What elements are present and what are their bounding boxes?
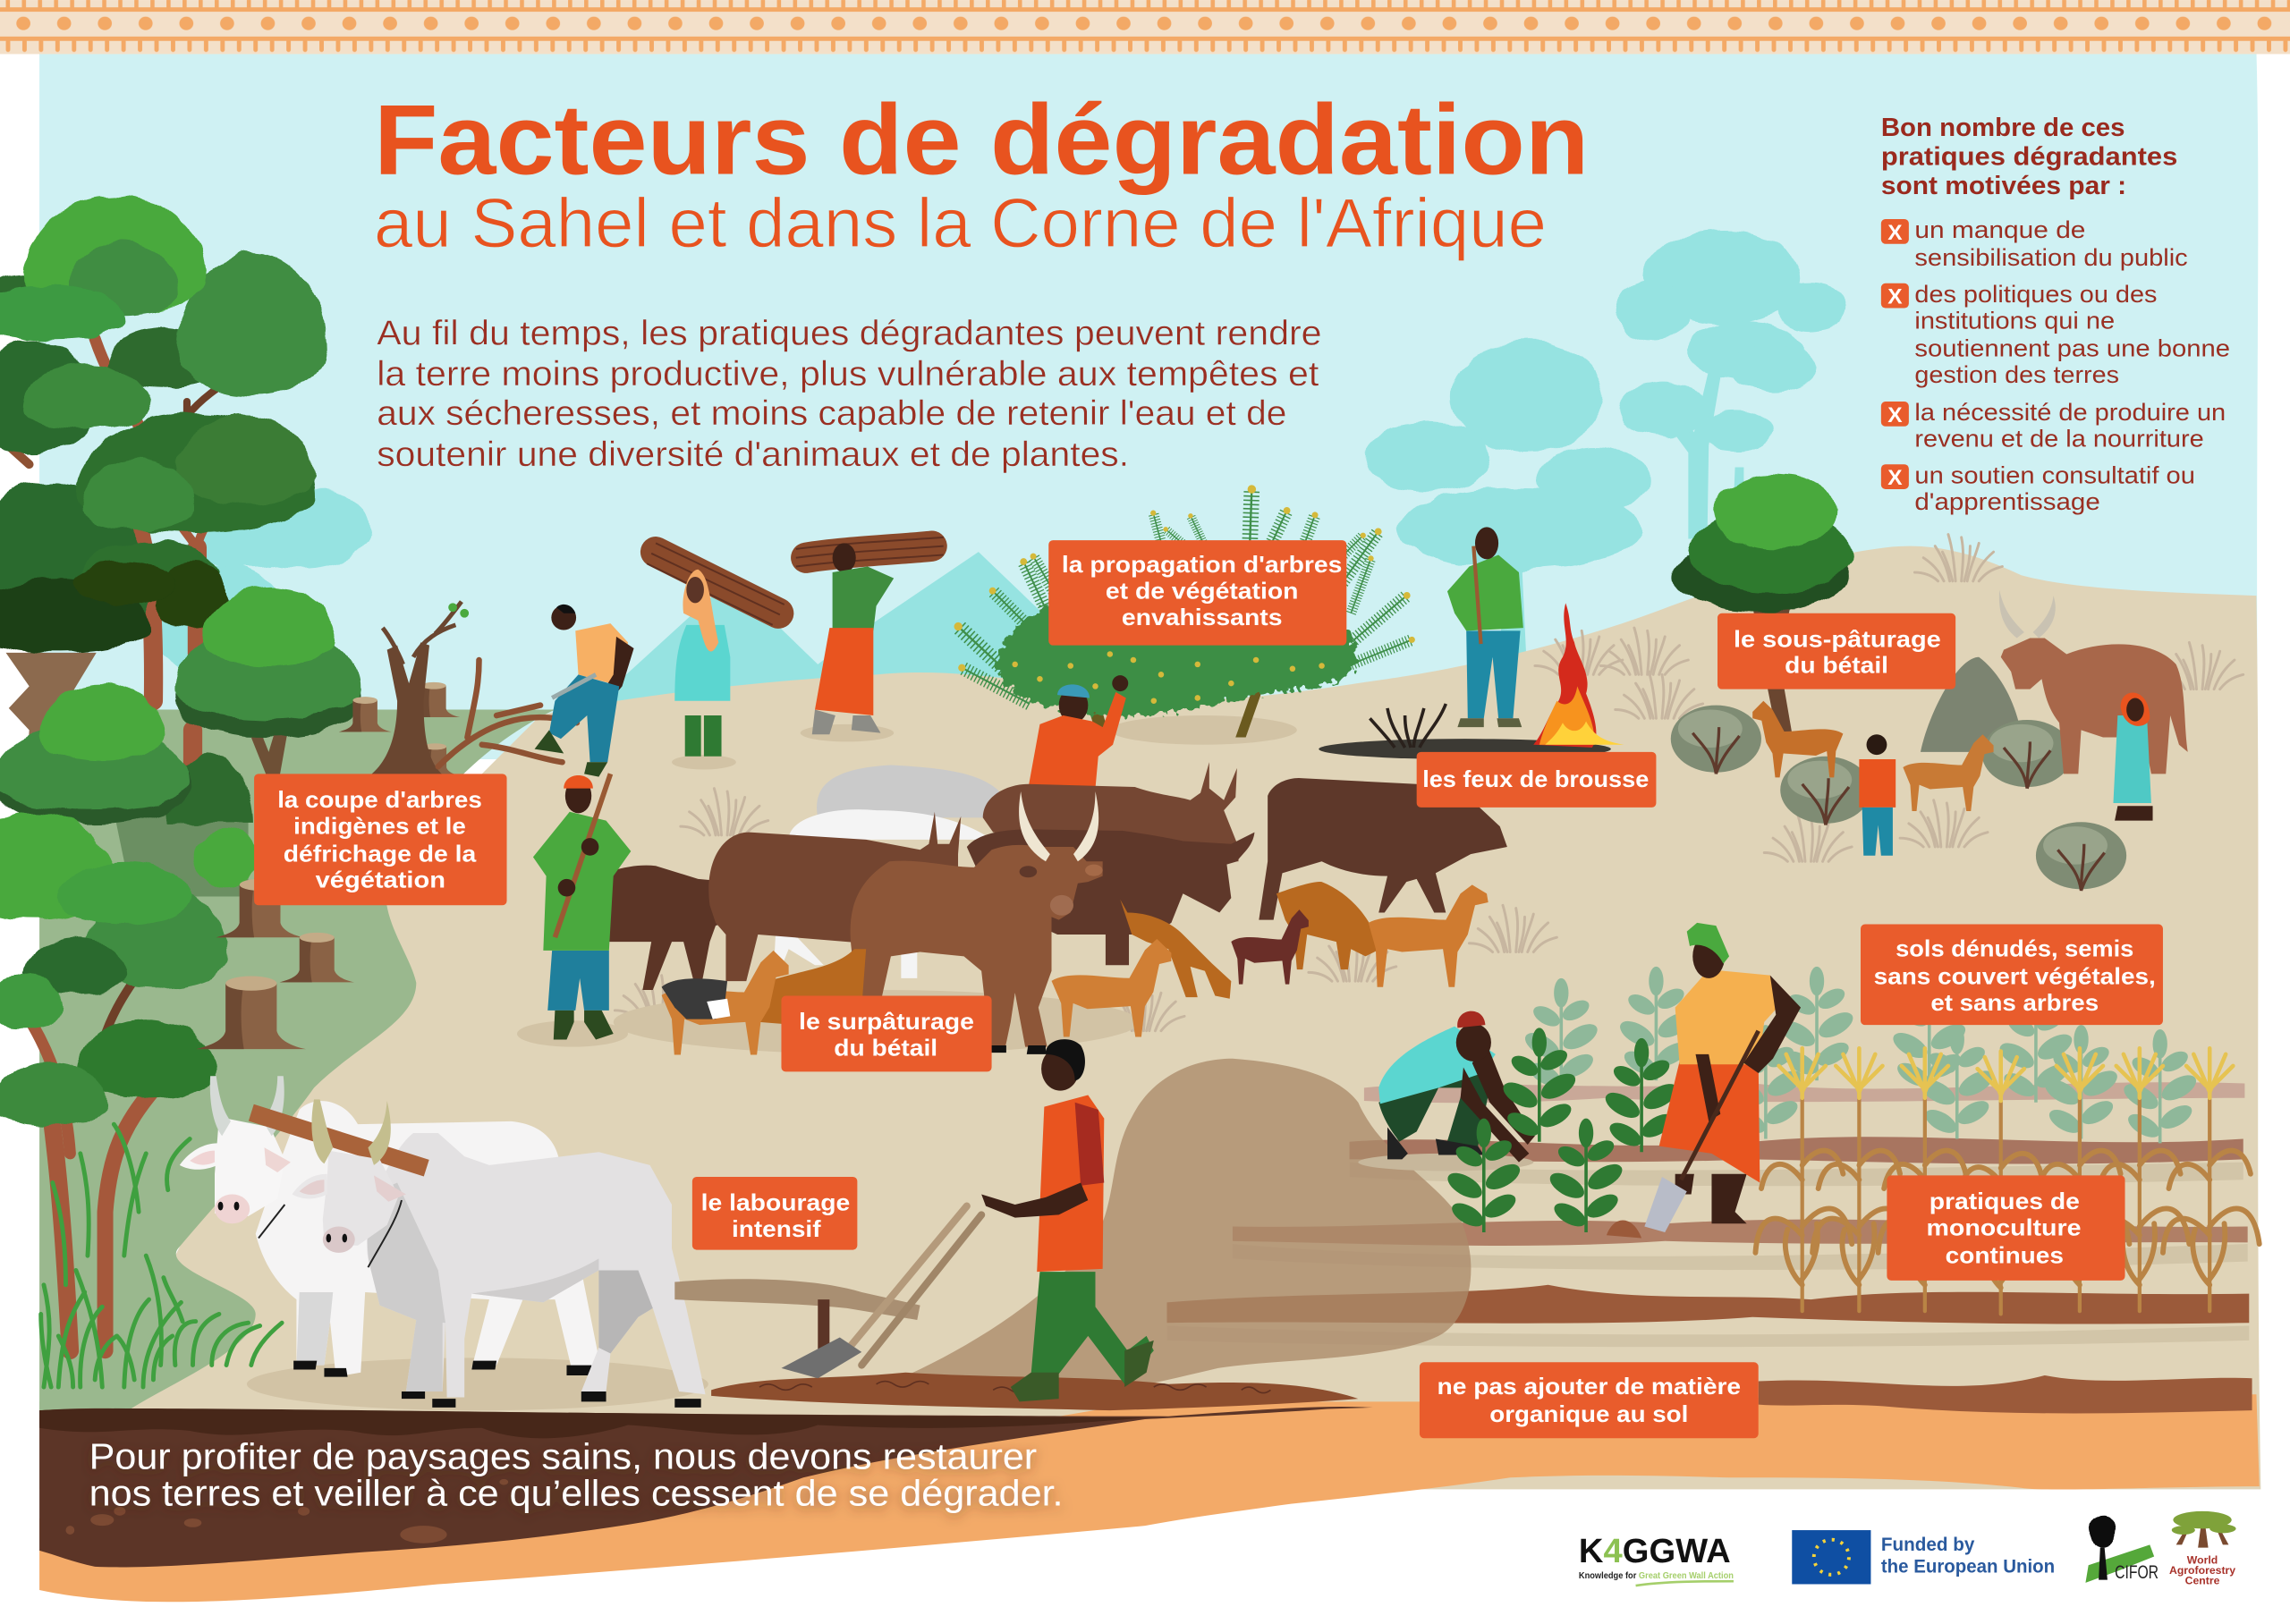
item: revenu: revenu et de la nourriture: [1914, 426, 2204, 453]
grazing goat: [1120, 900, 1231, 999]
goats: [662, 882, 1488, 1054]
logo: European Union: Funded by: [1881, 1535, 1975, 1555]
grey cow: [817, 765, 1004, 817]
label: propagation: la propagation d'arbres: [1062, 551, 1342, 578]
cattle herd: [609, 762, 1507, 1054]
orange goat right: [1369, 884, 1488, 987]
dust cloud: [861, 1059, 1471, 1394]
front ox head: [293, 1099, 406, 1267]
right tree: [1672, 473, 1852, 745]
crouching farmer: [1358, 1011, 1535, 1171]
bush sprigs: [953, 485, 1416, 707]
maroon goat: [1231, 909, 1309, 985]
label: propagation: et de végétation: [1106, 577, 1298, 604]
panel heading: Bon nombre de ces: [1881, 114, 2125, 142]
logo: K4GGWA: Knowledge for Great Green Wall Action: [1579, 1571, 1734, 1581]
background silhouettes: [149, 231, 1846, 701]
yoke: [251, 1112, 427, 1168]
corn plants: [1755, 1048, 2260, 1314]
item: sensibilisation: [1881, 216, 2188, 271]
label: propagation: envahissants: [1122, 604, 1282, 630]
field furrows: [1166, 1082, 2252, 1413]
label: la coupe d'arbres: végétation: [316, 867, 445, 893]
tan goat: [1052, 939, 1171, 1037]
zebu and woman at right: [1999, 590, 2188, 821]
cow far right: [1259, 778, 1507, 920]
ground: green area: [39, 710, 555, 1413]
logo: World Agroforestry Centre: Agroforestry: [2169, 1564, 2235, 1577]
intro paragraph: la terre moins productive, plus vulnérable aux tempêtes et: [377, 355, 1319, 393]
intro paragraph: aux sécheresses, et moins capable de retenir l'eau et de: [377, 394, 1286, 433]
panel heading: pratiques dégradantes: [1881, 143, 2177, 172]
back ox: [180, 1076, 598, 1377]
bean plants: bright: [1444, 1028, 1682, 1232]
label: sous-pâturage: [1718, 613, 1955, 689]
crowns: dark back layers: [0, 273, 314, 653]
intro paragraph: [377, 314, 1322, 474]
logo: European Union: [1792, 1530, 2055, 1584]
shrub behind label: [164, 754, 259, 888]
logo: European Union: the European Union: [1881, 1556, 2055, 1577]
label: surpâturage: du bétail: [834, 1034, 937, 1061]
label: matière organique: ne pas ajouter de matière: [1438, 1373, 1741, 1400]
title: Facteurs de dégradation: [374, 83, 1589, 195]
logo: World Agroforestry Centre: World: [2187, 1554, 2218, 1567]
item: politiques: X: [1887, 285, 1903, 309]
closing message: nos terres et veiller à ce qu’elles cessent de se dégrader.: [89, 1472, 1064, 1513]
label: sous-pâturage: du bétail: [1785, 652, 1888, 679]
brown cow: [708, 812, 961, 981]
rock and shrubs: [1671, 657, 2126, 891]
ploughman: [981, 1039, 1154, 1401]
soil layer: dark topsoil: [39, 1407, 1373, 1567]
small goats and child: [1752, 701, 1994, 856]
label: labourage: [692, 1177, 857, 1250]
item: sensibilisation: X: [1887, 221, 1903, 245]
label: labourage: intensif: [732, 1215, 821, 1242]
woman in teal: [2113, 692, 2153, 821]
ochre goat: [1276, 882, 1380, 969]
blue tree: centre: [1366, 342, 1649, 686]
label: feux de brousse: les feux de brousse: [1422, 765, 1649, 792]
front ox body: [367, 1133, 706, 1408]
item: soutien: X: [1887, 466, 1903, 490]
label: sols dénudés: et sans arbres: [1930, 989, 2099, 1016]
item: politiques: institutions qui ne: [1914, 307, 2115, 334]
grass tufts: [615, 535, 2243, 1031]
panel: motivations: [1881, 114, 2230, 515]
label: feux de brousse: [1417, 752, 1656, 808]
item: revenu: la nécessité de produire un: [1914, 399, 2226, 426]
back cow with horns: [983, 762, 1238, 861]
label: monoculture: monoculture: [1926, 1214, 2082, 1240]
item: politiques: soutiennent pas une bonne: [1914, 334, 2230, 361]
logo: K4GGWA: [1579, 1532, 1734, 1586]
dark cow: [967, 829, 1254, 965]
label: monoculture: pratiques de: [1930, 1188, 2080, 1214]
label: matière organique: organique au sol: [1489, 1400, 1688, 1427]
label: labourage: le labourage: [701, 1189, 850, 1216]
logo: CIFOR: [2085, 1516, 2159, 1583]
label: la coupe d'arbres: la coupe d'arbres: [277, 786, 482, 813]
child: [1859, 734, 1896, 856]
white oxen pair: [180, 1076, 708, 1410]
logo: CIFOR: CIFOR: [2115, 1562, 2159, 1583]
wood bundle: [647, 543, 785, 625]
trunks: [0, 339, 249, 1350]
intro paragraph: soutenir une diversité d'animaux et de plantes.: [377, 436, 1129, 474]
decorative top border: [0, 0, 2290, 54]
item: politiques: [1881, 281, 2230, 388]
item: sensibilisation: sensibilisation du public: [1914, 244, 2188, 271]
label: sols dénudés: sans couvert végétales,: [1874, 962, 2156, 989]
label: la coupe d'arbres: défrichage de la: [284, 840, 477, 867]
zebu: [2001, 639, 2188, 774]
cow behind herder: [609, 866, 734, 990]
sky: [39, 51, 2258, 759]
label: sols dénudés: sols dénudés, semis: [1896, 935, 2133, 961]
blue tree: left: [149, 487, 369, 676]
foreground cow: [851, 791, 1103, 1054]
label: la coupe d'arbres: indigènes et le: [293, 812, 466, 839]
label: monoculture: continues: [1946, 1241, 2064, 1268]
item: soutien: un soutien consultatif ou: [1914, 461, 2195, 488]
label: matière organique: [1420, 1362, 1759, 1438]
intro paragraph: Au fil du temps, les pratiques dégradantes peuvent rendre: [377, 314, 1322, 352]
grass: [41, 1124, 282, 1387]
shadow: [614, 990, 1139, 1054]
standing man near fire: [1447, 527, 1523, 727]
item: politiques: gestion des terres: [1914, 361, 2119, 388]
label: surpâturage: le surpâturage: [799, 1008, 974, 1035]
item: soutien: d'apprentissage: [1914, 488, 2100, 515]
bush shadow: [1110, 715, 1297, 745]
item: revenu: [1881, 399, 2226, 453]
tree B trunk and crown: [175, 587, 360, 912]
label: la coupe d'arbres: [254, 774, 507, 905]
label: propagation: [1048, 540, 1346, 646]
subtitle: au Sahel et dans la Corne de l'Afrique: [374, 183, 1547, 262]
item: revenu: X: [1887, 403, 1903, 427]
spotted goat: [662, 951, 789, 1054]
darker ground under trees: [114, 812, 249, 896]
item: politiques: des politiques ou des: [1914, 281, 2157, 308]
man raising arm: [1028, 675, 1128, 789]
label: sous-pâturage: le sous-pâturage: [1734, 625, 1941, 652]
logo: World Agroforestry Centre: [2169, 1511, 2236, 1586]
plough: [674, 1206, 981, 1378]
ground: sand: [39, 546, 2260, 1489]
herder in green robe: [517, 774, 631, 1047]
white cow: [774, 809, 992, 978]
woman farmer with shovel: [1607, 923, 1801, 1239]
woman carrying wood: [647, 543, 785, 769]
bushfire: [1319, 603, 1624, 759]
logo: World Agroforestry Centre: Centre: [2185, 1574, 2220, 1586]
mountains: [614, 552, 1081, 701]
label: sols dénudés: [1861, 925, 2163, 1025]
woman with skirt carrying wood: [796, 537, 944, 741]
thorny invasive bush: [953, 485, 1416, 745]
label: surpâturage: [781, 996, 992, 1071]
panel heading: [1881, 114, 2177, 200]
forest on the left: [0, 196, 460, 1387]
stumps: [197, 682, 460, 1049]
bean plants: faded: [1521, 967, 2201, 1143]
goat behind brown cow: [758, 949, 866, 1028]
soil layer: orange subsoil: [39, 1394, 2260, 1602]
crowns: top canopy: [0, 196, 327, 530]
label: monoculture: [1887, 1175, 2125, 1281]
closing message: Pour profiter de paysages sains, nous devons restaurer: [89, 1435, 1037, 1476]
item: soutien: [1881, 461, 2195, 515]
old tree base: [6, 653, 97, 774]
crowns: lower trees: [0, 683, 229, 1126]
panel heading: sont motivées par :: [1881, 172, 2126, 200]
item: sensibilisation: un manque de: [1914, 216, 2085, 243]
logo: K4GGWA: K4GGWA: [1579, 1532, 1731, 1569]
bush body: [995, 579, 1358, 716]
man cutting a branch: [535, 605, 634, 777]
tilled soil: [711, 1373, 1358, 1410]
blue tree: right: [1616, 231, 1846, 538]
closing message: [89, 1435, 1064, 1513]
dead tree and cut branch: [368, 602, 577, 777]
